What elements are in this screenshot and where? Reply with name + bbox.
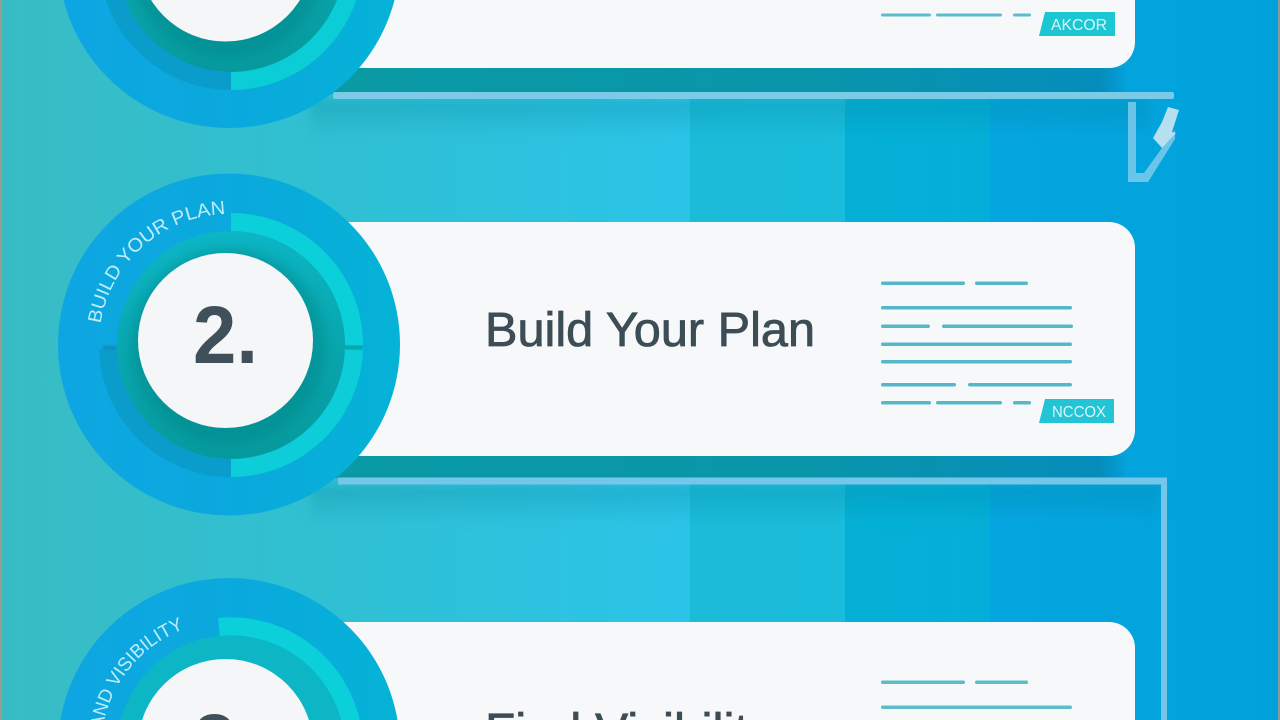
card 2 heading: Build Your Plan (485, 304, 815, 357)
icon: bracket and lightning bolt (1128, 102, 1179, 182)
card 3 (300, 622, 1135, 720)
teal disc (117, 231, 345, 459)
connector under card 1 (310, 68, 1174, 139)
step number: 2. (193, 290, 258, 381)
white centre (130, 249, 326, 445)
badge: card 2 (1039, 399, 1114, 423)
curved label: BUILD YOUR PLAN (88, 200, 224, 322)
step circle 2 (58, 174, 400, 516)
badge: card 2: NCCOX (1052, 404, 1106, 421)
step circle 3 (60, 578, 398, 720)
step circle 1 (58, 0, 400, 128)
connector under card 2 (310, 456, 1167, 720)
ring notches (103, 346, 116, 349)
badge: card 1: AKCOR (1051, 17, 1107, 34)
text lines: card 3 (881, 680, 1072, 709)
lower-left dark ring (108, 349, 231, 468)
card 1 (300, 0, 1135, 68)
text lines: card 2 (881, 282, 1073, 404)
card 2 (300, 222, 1135, 456)
cyan progress arcs (231, 222, 354, 345)
badge: card 1 (1039, 12, 1115, 36)
text lines: card 1 (881, 14, 1031, 16)
